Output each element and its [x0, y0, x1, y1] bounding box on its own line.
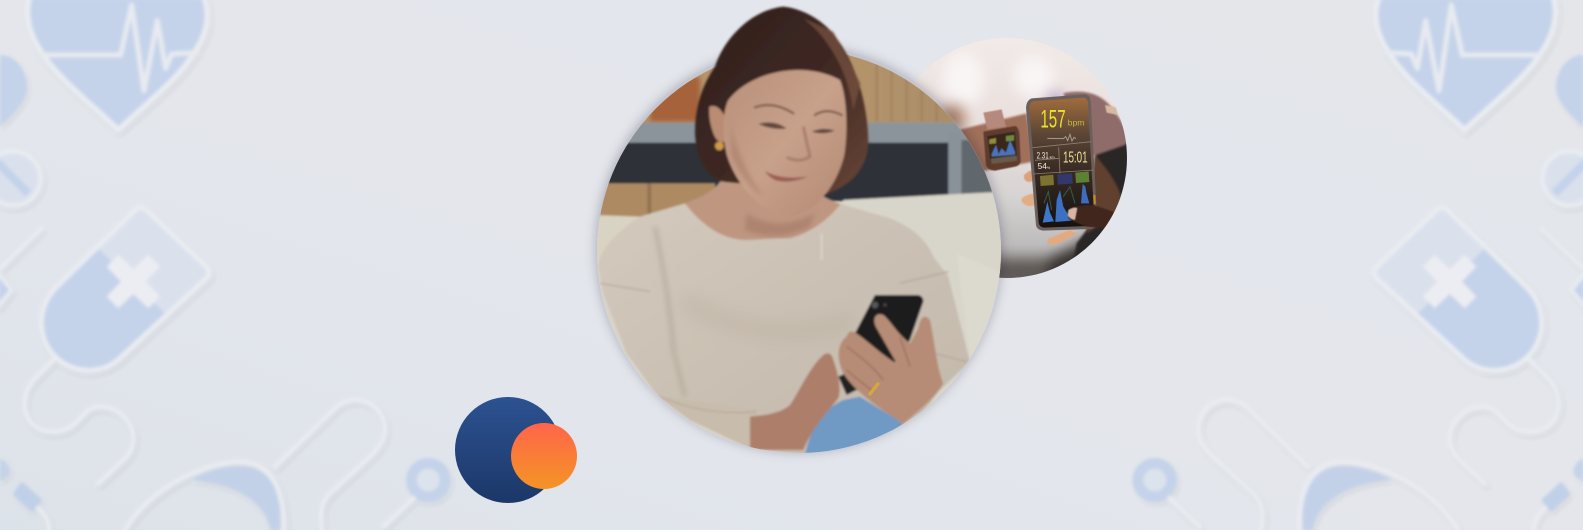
phone: [855, 295, 923, 365]
eyebrows: [755, 105, 842, 115]
left sleeve cuff: [664, 400, 738, 442]
blue circle: [455, 397, 561, 503]
ear: [709, 106, 728, 142]
head: [695, 7, 868, 216]
distance reading: 2.31: [1037, 150, 1049, 160]
eyes: [758, 122, 787, 129]
time reading: 15:01: [1063, 150, 1088, 167]
neck: [686, 180, 841, 241]
watch: [983, 109, 1021, 171]
decorative dots: blue and orange: [455, 397, 577, 503]
right hair lock: [803, 18, 861, 110]
humidity reading: 54%: [1038, 161, 1051, 171]
orange circle: [511, 423, 577, 489]
holding hand: [1087, 155, 1123, 233]
dark background behind holding hand: [1074, 140, 1127, 258]
wedding ring: [870, 384, 878, 394]
circle shadow: [597, 49, 1001, 453]
medical icon pattern: left: [0, 0, 445, 530]
sofa: [843, 192, 1007, 400]
earring: [715, 142, 724, 150]
wrist: [958, 113, 1033, 172]
cheek shadow: [730, 120, 763, 197]
back hand: [1063, 92, 1128, 156]
phone: bpm: [1068, 118, 1084, 128]
medical icon pattern: right: [1138, 0, 1583, 530]
sweater folds: [600, 283, 650, 292]
mouth: [765, 171, 808, 182]
photo circle: smartwatch and phone health data: [914, 38, 1127, 278]
face: [724, 70, 846, 216]
thumb: [1068, 205, 1114, 228]
hair back: [695, 7, 868, 195]
left hand: [750, 353, 840, 450]
heart rate reading: 157: [1040, 105, 1066, 133]
jeans: [805, 397, 903, 455]
phone: km: [1050, 155, 1055, 159]
photo circle: woman using a smartphone: [590, 7, 1010, 455]
sweater: [598, 203, 970, 455]
phone: [1026, 94, 1097, 231]
right hand: [839, 314, 943, 424]
room background: [642, 54, 956, 124]
nose: [787, 127, 810, 160]
